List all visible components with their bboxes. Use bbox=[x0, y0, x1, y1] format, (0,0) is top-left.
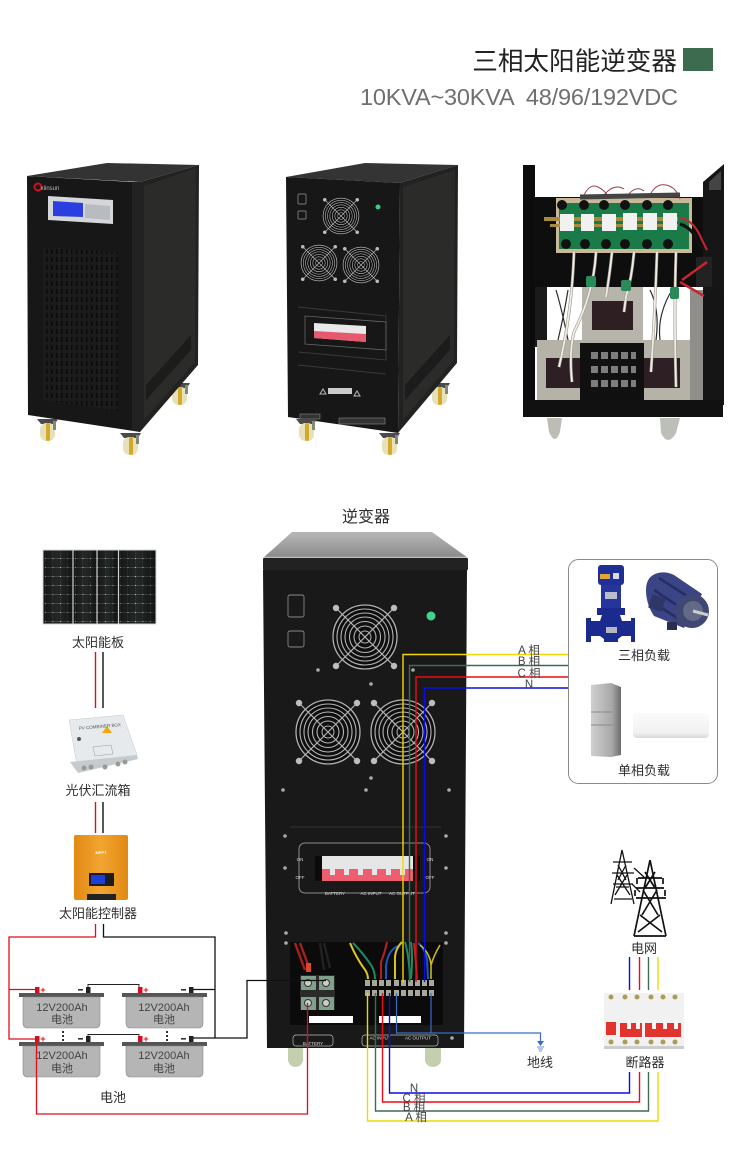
phase labels: grid side: A 相 bbox=[405, 1111, 427, 1124]
wiring compartment bbox=[290, 942, 443, 1025]
wire: ground bbox=[396, 993, 540, 1041]
label: grid: 电网 bbox=[631, 941, 657, 956]
product photo: front view: xlinsun bbox=[41, 186, 59, 192]
breaker panel: OFF bbox=[296, 875, 305, 880]
battery 3 bbox=[19, 1034, 104, 1077]
battery 3: 电池 bbox=[51, 1062, 73, 1075]
icon: combiner box: PV COMBINER BOX bbox=[79, 722, 121, 731]
cabinet body bbox=[263, 570, 467, 1048]
label: single-phase load: 单相负载 bbox=[618, 763, 670, 778]
inverter cabinet bbox=[263, 532, 468, 1067]
panel: solar chain bbox=[43, 550, 156, 921]
label: battery: 电池 bbox=[100, 1090, 126, 1105]
wires combiner to controller bbox=[96, 802, 103, 833]
battery 4: 电池 bbox=[153, 1062, 175, 1075]
breaker panel bbox=[296, 843, 435, 896]
icon: refrigerator bbox=[591, 683, 621, 757]
battery 3: 12V200Ah bbox=[36, 1050, 88, 1062]
fan lower left bbox=[295, 699, 361, 765]
icon: air conditioner bbox=[633, 713, 709, 738]
phase labels: grid side: C 相 bbox=[402, 1092, 426, 1105]
battery link wires bbox=[88, 984, 139, 1036]
terminal labels: AC INPUT bbox=[369, 1036, 391, 1040]
wire: battery to inverter positive bbox=[36, 1003, 308, 1114]
icon: water pump bbox=[586, 565, 635, 642]
wires: grid to breaker bbox=[630, 957, 658, 990]
breaker panel: OFF bbox=[426, 875, 435, 880]
wires: output lines to loads bbox=[403, 654, 568, 982]
icon: combiner box bbox=[69, 715, 138, 773]
breaker panel: AC OUTPUT bbox=[389, 891, 415, 896]
wheels bbox=[288, 1048, 441, 1067]
phase labels: grid side: N bbox=[410, 1083, 418, 1095]
phase labels: load side: C 相 bbox=[518, 667, 540, 680]
subtitle: 10KVA~30KVA 48/96/192VDC bbox=[360, 84, 678, 110]
terminal labels bbox=[293, 1035, 438, 1046]
screws bbox=[281, 668, 454, 1040]
icon: solar panel bbox=[43, 550, 156, 624]
cabinet top bbox=[263, 532, 468, 558]
icon: solar charge controller: MPPT bbox=[95, 850, 107, 855]
title: 三相太阳能逆变器 bbox=[472, 47, 677, 76]
terminal labels: BATTERY bbox=[303, 1041, 323, 1046]
breaker panel: AC INPUT bbox=[360, 891, 382, 896]
phase labels: load side: A 相 bbox=[518, 644, 540, 657]
battery 4: 12V200Ah bbox=[138, 1050, 190, 1062]
terminal labels: AC OUTPUT bbox=[405, 1036, 431, 1040]
terminal block bbox=[365, 980, 434, 996]
cabinet lip bbox=[263, 558, 468, 570]
battery 1: 电池 bbox=[51, 1013, 73, 1026]
battery 2: 电池 bbox=[153, 1013, 175, 1026]
fan top bbox=[332, 604, 398, 670]
battery 1 bbox=[19, 985, 104, 1028]
label: solar controller: 太阳能控制器 bbox=[59, 906, 137, 921]
phase labels: grid side bbox=[402, 1083, 427, 1124]
product photo: interior view bbox=[523, 164, 724, 440]
load panel bbox=[568, 560, 718, 784]
label: solar panel: 太阳能板 bbox=[72, 635, 124, 650]
label: ground: 地线 bbox=[527, 1055, 553, 1070]
title colour block bbox=[683, 48, 713, 71]
label: inverter: 逆变器 bbox=[342, 508, 390, 526]
breaker panel: ON bbox=[427, 857, 433, 862]
icon: solar charge controller bbox=[74, 835, 128, 900]
label: combiner box: 光伏汇流箱 bbox=[65, 783, 131, 798]
product photo: front view bbox=[27, 163, 199, 455]
phase labels: grid side: B 相 bbox=[403, 1101, 425, 1114]
icon: circuit breakers bbox=[604, 993, 684, 1049]
battery 2: 12V200Ah bbox=[138, 1002, 190, 1014]
phase labels: load side bbox=[518, 644, 540, 691]
product photo: rear view bbox=[286, 163, 458, 455]
label: breaker: 断路器 bbox=[625, 1055, 665, 1070]
wires: battery negative bus bbox=[104, 924, 326, 1038]
rocker switch outlines bbox=[288, 595, 304, 647]
phase labels: load side: B 相 bbox=[518, 655, 540, 668]
panel: battery bank bbox=[9, 924, 326, 1114]
breaker panel: BATTERY bbox=[325, 891, 345, 896]
icon: ground symbol bbox=[537, 1041, 544, 1051]
wires: battery positive bus bbox=[9, 924, 96, 1039]
battery 2 bbox=[122, 985, 207, 1028]
status led bbox=[426, 612, 436, 620]
ellipsis dots bbox=[62, 1031, 168, 1041]
label: three-phase load: 三相负载 bbox=[618, 648, 670, 663]
wires: grid input lines bbox=[368, 993, 658, 1121]
icon: electric motor bbox=[646, 572, 709, 630]
wires panel to combiner bbox=[96, 652, 103, 708]
fan lower right bbox=[370, 699, 436, 765]
breaker panel: ON bbox=[297, 857, 303, 862]
icon: power grid towers bbox=[611, 850, 666, 936]
phase labels: load side: N bbox=[525, 679, 533, 691]
battery 4 bbox=[122, 1034, 207, 1077]
battery 1: 12V200Ah bbox=[36, 1002, 88, 1014]
